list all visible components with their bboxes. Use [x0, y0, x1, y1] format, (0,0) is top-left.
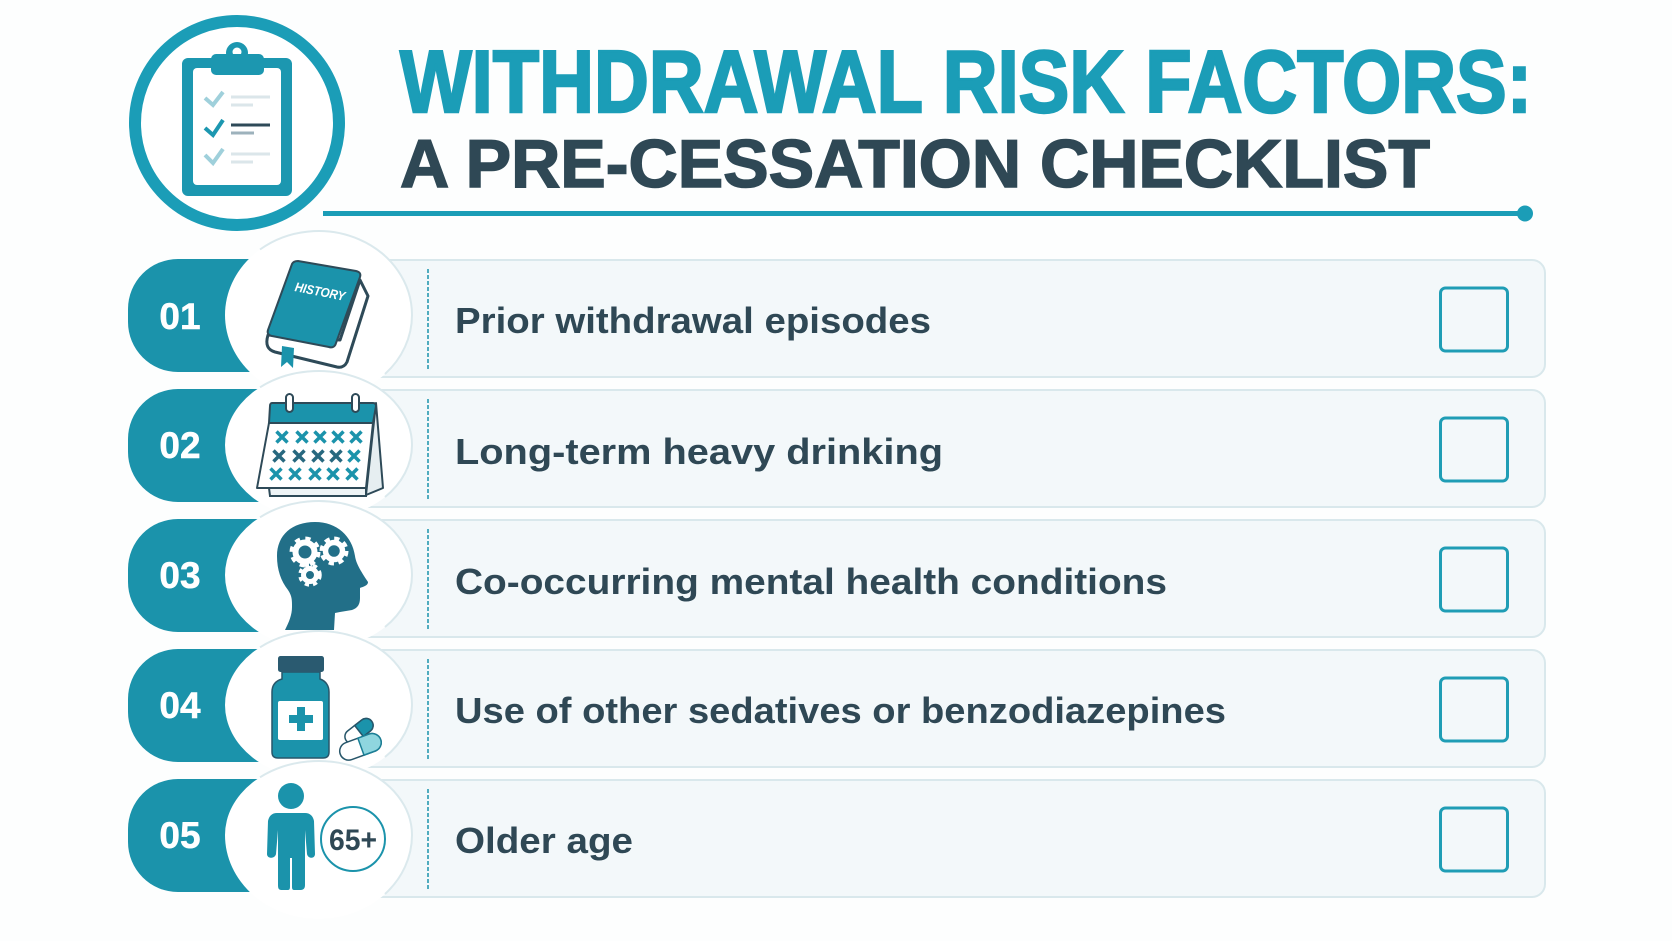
row 4 number: 04	[159, 685, 201, 726]
row 3 card	[340, 520, 1545, 637]
row 5 divider	[427, 789, 429, 889]
row 4 card	[340, 650, 1545, 767]
row 1 number: 01	[159, 296, 201, 337]
icon: person with 65+ badge: 65+	[329, 824, 377, 857]
row 5 card	[340, 780, 1545, 897]
panel: row 2	[128, 371, 1545, 519]
row 3 icon backing circle	[225, 501, 412, 649]
icon: person with 65+ badge	[267, 783, 385, 890]
panel: row 1	[128, 231, 1545, 399]
row 3 divider	[427, 529, 429, 629]
icon: calendar	[257, 394, 383, 496]
row 3 label: Co-occurring mental health conditions	[455, 561, 1167, 602]
title rule with end dot	[323, 206, 1533, 222]
row 1 card	[340, 260, 1545, 377]
row 2 card	[340, 390, 1545, 507]
row 2 checkbox	[1440, 418, 1508, 481]
row 2 number: 02	[159, 425, 201, 466]
row 4 number pill	[128, 649, 348, 762]
title	[400, 32, 1532, 202]
icon: history book	[267, 261, 368, 368]
row 2 icon backing circle	[225, 371, 412, 519]
icon: pill bottle and capsules	[272, 656, 384, 763]
icon: history book: HISTORY	[294, 279, 348, 304]
icon: head with gears	[277, 522, 368, 630]
title: A PRE-CESSATION CHECKLIST	[400, 126, 1430, 202]
row 5 label: Older age	[455, 820, 633, 861]
row 5 number pill	[128, 779, 348, 892]
row 1 icon backing circle	[225, 231, 412, 399]
row 4 label: Use of other sedatives or benzodiazepines	[455, 690, 1226, 731]
icon: clipboard in circle	[135, 21, 339, 225]
row 3 number pill	[128, 519, 348, 632]
row 2 label: Long-term heavy drinking	[455, 431, 943, 472]
panel: row 5	[128, 761, 1545, 919]
panel: row 4	[128, 631, 1545, 779]
row 1 label: Prior withdrawal episodes	[455, 300, 931, 341]
panel: row 3	[128, 501, 1545, 649]
row 1 checkbox	[1440, 288, 1508, 351]
row 4 checkbox	[1440, 678, 1508, 741]
row 5 number: 05	[159, 815, 201, 856]
row 3 number: 03	[159, 555, 201, 596]
row 5 checkbox	[1440, 808, 1508, 871]
row 1 divider	[427, 269, 429, 369]
row 1 number pill	[128, 259, 348, 372]
row 4 icon backing circle	[225, 631, 412, 779]
row 2 number pill	[128, 389, 348, 502]
row 3 checkbox	[1440, 548, 1508, 611]
row 2 divider	[427, 399, 429, 499]
row 4 divider	[427, 659, 429, 759]
row 5 icon backing circle	[225, 761, 412, 919]
